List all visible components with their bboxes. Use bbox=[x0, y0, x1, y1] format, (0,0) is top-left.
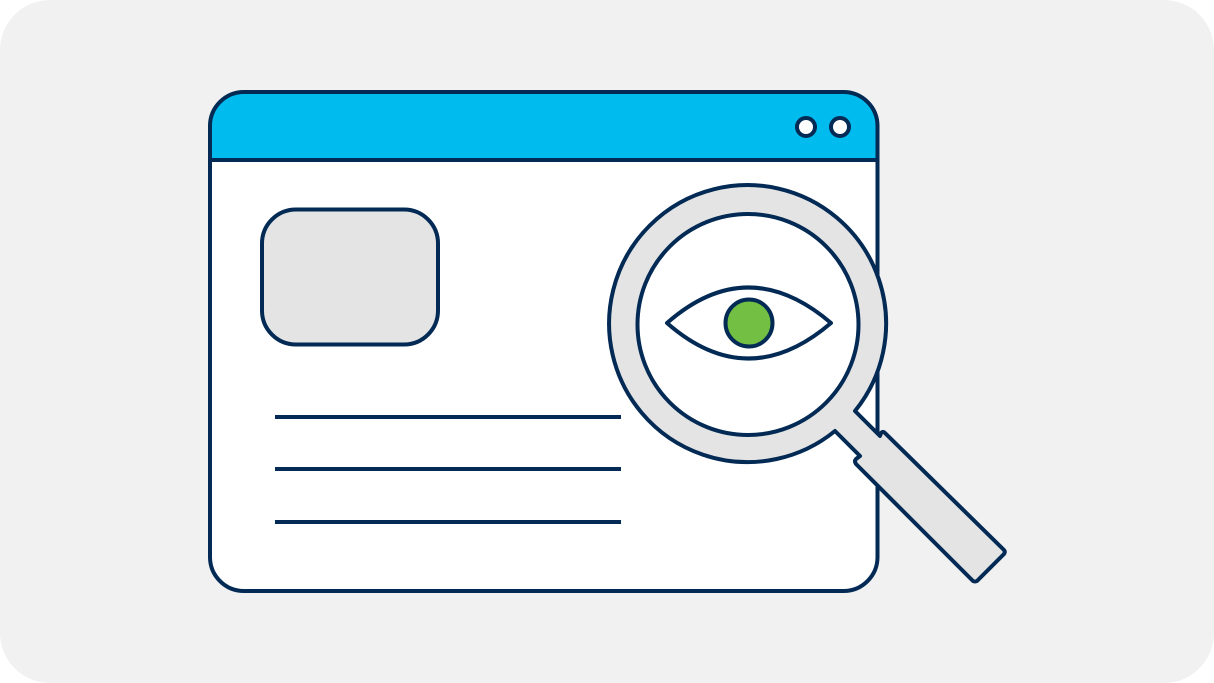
image placeholder bbox=[262, 210, 438, 344]
browser window bbox=[210, 92, 878, 591]
magnifier rim and handle bbox=[609, 185, 1005, 581]
window title bar bbox=[210, 92, 878, 160]
icon: eye bbox=[667, 288, 831, 358]
text lines bbox=[275, 417, 621, 522]
magnifier lens bbox=[638, 214, 858, 435]
window body bbox=[210, 160, 878, 591]
eye iris bbox=[726, 300, 772, 346]
magnifying glass bbox=[609, 185, 1005, 581]
window control dots bbox=[797, 118, 849, 136]
eye outline bbox=[667, 288, 831, 358]
